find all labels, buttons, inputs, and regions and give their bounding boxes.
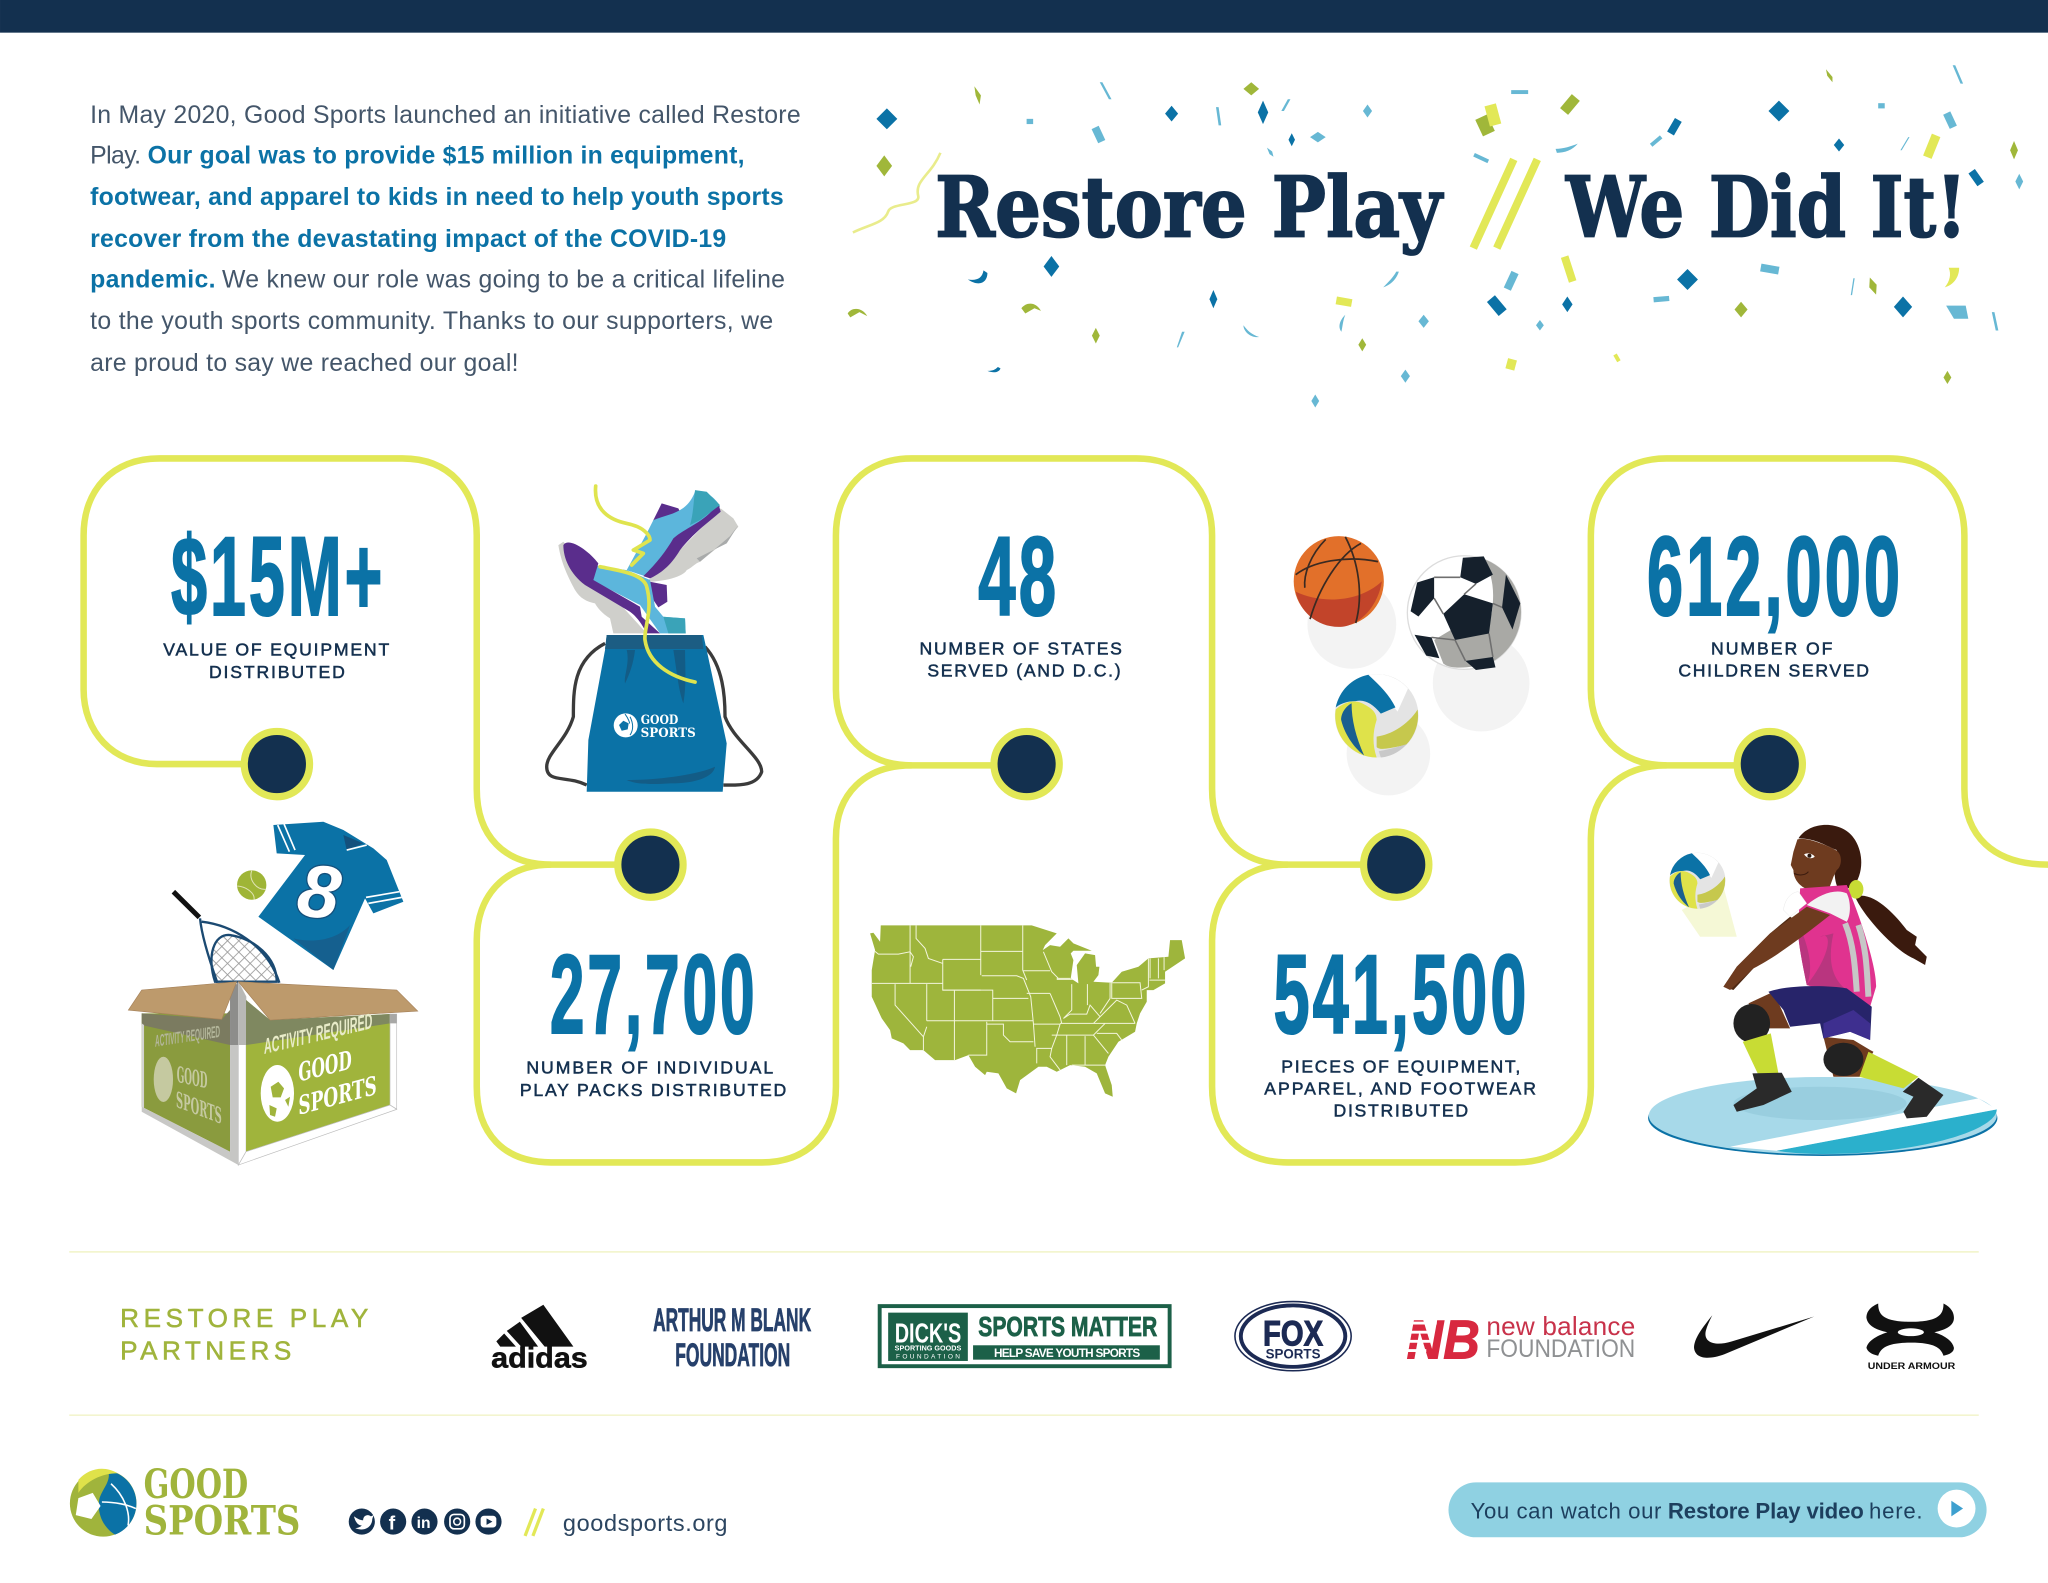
intro paragraph: to the youth sports community. Thanks to our supporters, we xyxy=(90,308,773,335)
stat: 48: 48 xyxy=(978,513,1059,639)
stat: 27,700 xyxy=(520,931,786,1100)
icon: box xyxy=(128,982,418,1165)
stat: 541,500 xyxy=(1264,931,1536,1121)
stat: 612,000 xyxy=(1647,513,1903,681)
partners heading: PARTNERS xyxy=(120,1336,291,1366)
logo: adidas: adidas xyxy=(491,1342,588,1374)
logo: New Balance Foundation: FOUNDATION xyxy=(1486,1336,1635,1363)
icon: ball mark xyxy=(70,1469,137,1537)
icon: play xyxy=(1938,1490,1975,1527)
illustration: open box with shirt, ball and racket xyxy=(128,822,418,1165)
icon: player xyxy=(1723,825,1943,1118)
icon: ball xyxy=(1669,853,1725,909)
title: Restore Play xyxy=(935,158,1444,256)
icon: drawstrings xyxy=(547,643,762,785)
icon: soccer ball xyxy=(1407,556,1521,670)
partners heading: RESTORE PLAY xyxy=(120,1303,368,1333)
icon: box: ACTIVITY REQUIRED xyxy=(155,1022,220,1051)
stat: $15M+: DISTRIBUTED xyxy=(209,662,345,682)
icon: box: SPORTS xyxy=(298,1070,377,1122)
icon: tennis ball xyxy=(237,870,266,900)
stat: 48: SERVED (AND D.C.) xyxy=(927,661,1121,681)
logo: Good Sports: GOOD xyxy=(144,1460,248,1508)
logo: Fox Sports: SPORTS xyxy=(1266,1346,1320,1361)
icon: box: ACTIVITY REQUIRED xyxy=(264,1008,372,1059)
intro paragraph: pandemic. xyxy=(90,266,216,293)
logo: Dick's Sports Matter: SPORTS MATTER xyxy=(978,1311,1157,1342)
logo: Dick's Sports Matter: SPORTING GOODS xyxy=(895,1345,962,1353)
logo: Good Sports xyxy=(70,1460,300,1545)
icon: volleyball xyxy=(1335,674,1418,758)
icon: bag body: SPORTS xyxy=(641,725,696,740)
confetti xyxy=(848,65,2023,408)
logo: New Balance Foundation xyxy=(1400,1308,1635,1370)
icon: bag body: GOOD xyxy=(641,712,678,727)
logo: Dick's Sports Matter xyxy=(880,1306,1170,1366)
icon: box: SPORTS xyxy=(176,1087,222,1130)
illustration: US map xyxy=(870,925,1185,1097)
video button: Restore Play video xyxy=(1668,1498,1864,1523)
logo: Fox Sports xyxy=(1235,1302,1351,1371)
social icons: in xyxy=(417,1515,431,1532)
partners heading xyxy=(120,1303,368,1366)
icon: bag body xyxy=(587,635,727,792)
stat: $15M+ xyxy=(163,513,389,682)
icon: racket xyxy=(173,892,279,983)
icon: court disc xyxy=(1648,1077,1997,1156)
stat: 48 xyxy=(920,513,1122,681)
logo: adidas xyxy=(491,1305,588,1374)
divider: top of partners xyxy=(69,1251,1979,1253)
logo: Arthur M Blank Foundation: ARTHUR M BLANK xyxy=(653,1301,811,1338)
icon: sneakers xyxy=(558,490,738,633)
logo: Dick's Sports Matter: FOUNDATION xyxy=(896,1353,960,1360)
stat: $15M+: VALUE OF EQUIPMENT xyxy=(163,640,389,660)
logo: Under Armour xyxy=(1866,1303,1956,1371)
intro paragraph: Our goal was to provide $15 million in equipment, xyxy=(148,142,744,169)
illustration: sports balls xyxy=(1294,536,1529,795)
illustration: drawstring bag with sneakers xyxy=(547,486,762,792)
logo: New Balance Foundation: new balance xyxy=(1486,1311,1635,1341)
intro paragraph xyxy=(90,102,801,377)
logo: Arthur M Blank Foundation: FOUNDATION xyxy=(675,1336,790,1373)
video button: here. xyxy=(1869,1498,1923,1523)
icon: ball trail xyxy=(1682,887,1737,937)
logo: Dick's Sports Matter: HELP SAVE YOUTH SPORTS xyxy=(994,1347,1140,1360)
stat: 541,500: APPAREL, AND FOOTWEAR xyxy=(1264,1079,1536,1099)
stat: 541,500: PIECES OF EQUIPMENT, xyxy=(1281,1056,1520,1076)
stat: 27,700: PLAY PACKS DISTRIBUTED xyxy=(520,1080,786,1100)
footer slashes xyxy=(525,1509,543,1536)
icon: basketball xyxy=(1294,536,1384,627)
logo: New Balance Foundation: NB xyxy=(1407,1308,1480,1370)
logo: Good Sports: SPORTS xyxy=(144,1497,300,1545)
video button: You can watch our xyxy=(1471,1498,1662,1523)
stat: 541,500: 541,500 xyxy=(1273,931,1529,1057)
divider: bottom of partners xyxy=(69,1414,1979,1416)
title: We Did It! xyxy=(1565,158,1967,256)
stat: 612,000: NUMBER OF xyxy=(1711,638,1833,658)
stat: 27,700: NUMBER OF INDIVIDUAL xyxy=(526,1058,773,1078)
connector line path through stat panels xyxy=(84,458,2048,1162)
intro paragraph: footwear, and apparel to kids in need to help youth sports xyxy=(90,184,784,211)
icon: jersey xyxy=(258,822,403,970)
intro paragraph: Play. xyxy=(90,142,141,169)
intro paragraph: recover from the devastating impact of the COVID-19 xyxy=(90,226,726,253)
title slashes xyxy=(1473,159,1537,248)
logo: Under Armour: UNDER ARMOUR xyxy=(1868,1361,1956,1371)
intro paragraph: In May 2020, Good Sports launched an initiative called Restore xyxy=(90,102,801,129)
stat: 612,000: CHILDREN SERVED xyxy=(1678,661,1869,681)
intro paragraph: We knew our role was going to be a critical lifeline xyxy=(222,266,785,293)
stat: 48: NUMBER OF STATES xyxy=(920,638,1122,658)
icon: box: GOOD xyxy=(298,1045,352,1089)
logo: Dick's Sports Matter: DICK'S xyxy=(895,1318,961,1349)
intro paragraph: are proud to say we reached our goal! xyxy=(90,350,519,377)
connector nodes xyxy=(244,731,1802,897)
stat: 541,500: DISTRIBUTED xyxy=(1334,1101,1468,1121)
logo: Fox Sports: FOX xyxy=(1263,1314,1323,1353)
icon: box: GOOD xyxy=(177,1062,207,1094)
ball shadows xyxy=(1307,580,1529,795)
stat: 27,700: 27,700 xyxy=(550,931,758,1057)
social icons xyxy=(349,1509,502,1535)
icon: jersey: 8 xyxy=(293,847,346,936)
website: goodsports.org xyxy=(563,1510,728,1536)
illustration: volleyball player xyxy=(1648,825,1997,1156)
top bar xyxy=(0,0,2048,33)
logo: Arthur M Blank Foundation xyxy=(653,1301,811,1373)
video button xyxy=(1448,1482,1987,1537)
title xyxy=(935,158,1967,256)
logo: Nike swoosh xyxy=(1694,1315,1814,1358)
stat: $15M+: $15M+ xyxy=(171,513,385,639)
icon: laces xyxy=(595,486,695,682)
social icons: f xyxy=(389,1512,396,1534)
